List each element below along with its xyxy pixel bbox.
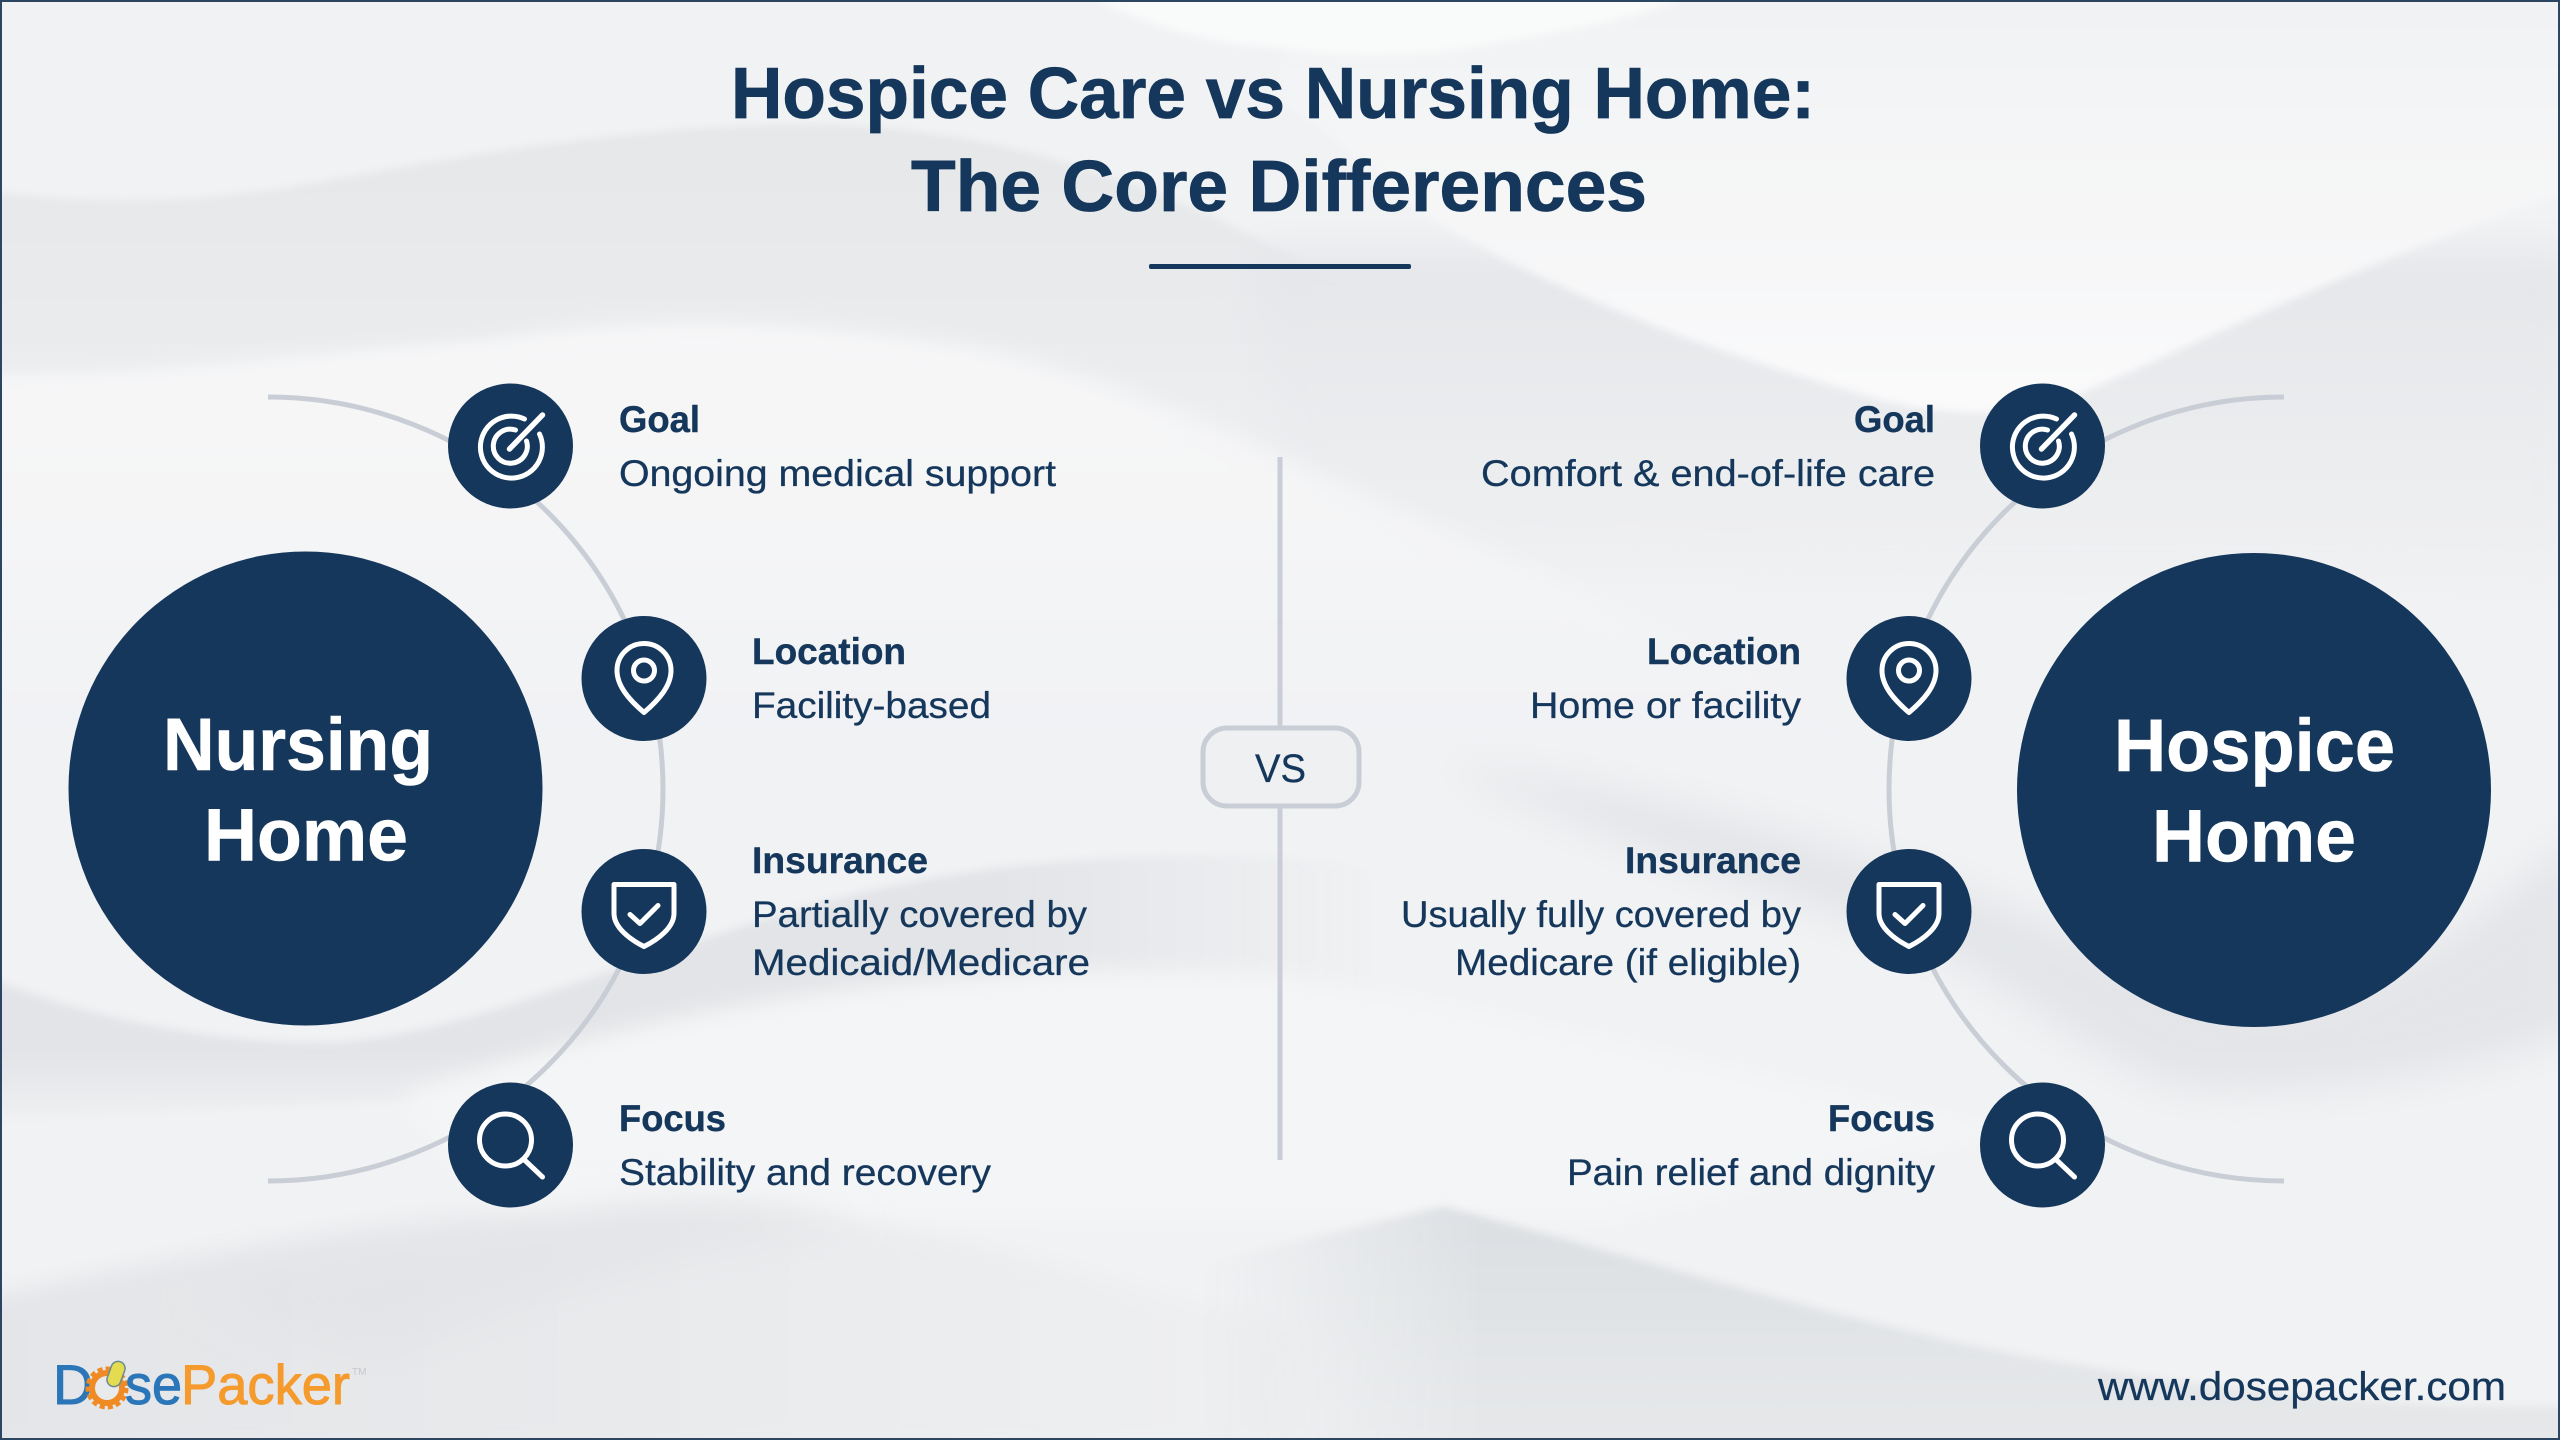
text: hospice focus — [1567, 1098, 1936, 1193]
text: hospice location: Location — [1647, 631, 1801, 672]
text: hospice insurance: Medicare (if eligible) — [1455, 942, 1801, 983]
hospice home circle: Home — [2152, 794, 2356, 878]
text: hospice location: Home or facility — [1530, 685, 1802, 726]
icon: focus magnifier — [1980, 1082, 2105, 1208]
text: hospice insurance: Insurance — [1625, 840, 1801, 881]
text: nursing goal: Ongoing medical support — [619, 453, 1057, 494]
text: nursing location: Facility-based — [752, 685, 991, 726]
text: hospice goal: Goal — [1854, 399, 1935, 440]
panel: nursing home — [68, 384, 1090, 1208]
icon: logo gear and pill — [88, 1359, 127, 1407]
title underline — [1149, 264, 1411, 269]
title — [731, 54, 1815, 227]
website url: www.dosepacker.com — [2097, 1365, 2506, 1409]
text: nursing insurance: Partially covered by — [752, 894, 1088, 935]
hospice home circle — [2017, 553, 2491, 1027]
text: hospice insurance — [1401, 840, 1802, 983]
text: hospice insurance: Usually fully covered by — [1401, 894, 1802, 935]
icon: goal target — [1980, 384, 2105, 508]
text: nursing insurance: Insurance — [752, 840, 928, 881]
icon: insurance shield — [582, 849, 706, 974]
text: hospice focus: Focus — [1828, 1098, 1935, 1139]
centre divider — [1278, 457, 1282, 1160]
text: nursing focus — [619, 1098, 992, 1193]
vs badge: VS — [1255, 747, 1306, 791]
text: hospice goal: Comfort & end-of-life care — [1481, 453, 1935, 494]
text: nursing location — [752, 631, 991, 726]
logo: dosepacker: Packer — [181, 1353, 350, 1416]
text: nursing insurance: Medicaid/Medicare — [752, 942, 1090, 983]
icon: location pin — [1846, 616, 1972, 741]
nursing home circle: Home — [204, 794, 408, 876]
text: nursing focus: Stability and recovery — [619, 1152, 992, 1193]
lower waves — [1443, 766, 2560, 1091]
connector arc: hospice home — [1889, 397, 2284, 1181]
nursing home circle — [68, 552, 542, 1026]
text: hospice focus: Pain relief and dignity — [1567, 1152, 1936, 1193]
title: The Core Differences — [911, 147, 1647, 227]
vs badge — [1203, 728, 1359, 806]
text: hospice goal — [1481, 399, 1935, 494]
logo: dosepacker: TM — [352, 1367, 366, 1378]
hospice home circle: Hospice — [2114, 704, 2395, 787]
icon: insurance shield — [1846, 849, 1972, 974]
logo: dosepacker: se — [125, 1353, 182, 1416]
icon: goal target — [448, 384, 573, 508]
nursing home circle: Nursing — [163, 703, 433, 786]
text: nursing location: Location — [752, 631, 906, 672]
icon: focus magnifier — [448, 1082, 573, 1208]
text: nursing goal: Goal — [619, 399, 700, 440]
text: nursing insurance — [752, 840, 1090, 983]
title: Hospice Care vs Nursing Home: — [731, 54, 1815, 134]
panel: hospice home — [1401, 384, 2491, 1208]
text: hospice location — [1530, 631, 1802, 726]
connector arc: nursing home — [268, 397, 663, 1181]
text: nursing goal — [619, 399, 1057, 494]
text: nursing focus: Focus — [619, 1098, 726, 1139]
logo: dosepacker: D — [53, 1353, 93, 1416]
icon: location pin — [582, 616, 706, 741]
logo: dosepacker — [53, 1353, 366, 1416]
